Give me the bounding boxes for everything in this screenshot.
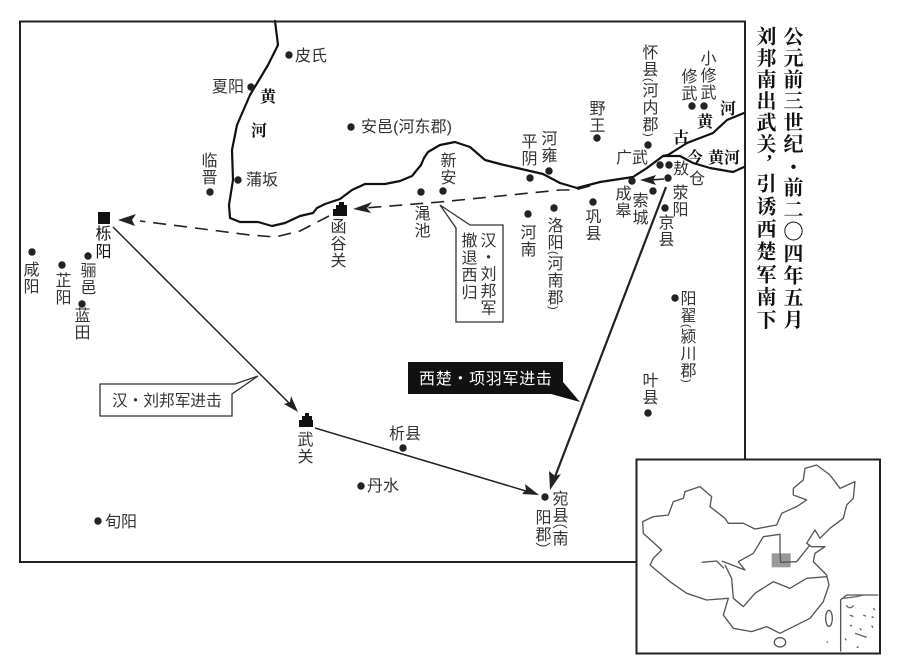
- inset: China locator map: [636, 460, 880, 654]
- inset: Yangtze River: [725, 565, 827, 607]
- place: 河雍: [538, 130, 558, 175]
- place: 平阴: [518, 133, 538, 182]
- place: 怀县: 怀县 ( 河内郡 ): [640, 44, 658, 136]
- title: 刘邦南出武关: [753, 25, 776, 155]
- place: 阳翟: [671, 290, 696, 382]
- place: 芷阳: 芷阳: [52, 272, 72, 306]
- place: 宛县: 宛县: [550, 490, 568, 524]
- title: 前二〇四年五月: [780, 177, 803, 331]
- place: 函谷关: [328, 202, 347, 269]
- place: 临晋: 临晋: [198, 152, 218, 186]
- river label: 古黄河: 古: [673, 128, 689, 147]
- title: ・: [780, 157, 802, 177]
- place: 索城: [630, 187, 657, 226]
- place: 敖仓: 仓: [689, 170, 705, 188]
- inset: Hainan: [774, 638, 786, 647]
- place: 新安: 新安: [438, 152, 456, 186]
- callout: 西楚·项羽军进击: [408, 362, 580, 402]
- place: 武关: [294, 413, 314, 465]
- place: 河南: [518, 210, 536, 258]
- place: 渑池: 渑池: [412, 205, 430, 239]
- place: 小修武: 小修武: [698, 50, 716, 101]
- place: 河雍: 河雍: [538, 130, 558, 164]
- place: 京县: [656, 204, 674, 248]
- title: [753, 25, 803, 332]
- place: 临晋: [198, 152, 218, 196]
- place: 宛县: [532, 490, 568, 547]
- callout: 汉·刘邦军撤退西归: 撤退西归: [458, 232, 478, 301]
- callout: 汉·刘邦军进击: 汉・刘邦军进击: [112, 392, 222, 410]
- place: 渑池: [412, 188, 430, 239]
- inset: Yellow River: [702, 534, 810, 570]
- place: 索城: 索城: [630, 192, 648, 226]
- place: 洛阳: 洛阳 ( 河南郡 ): [544, 217, 564, 309]
- place: 京县: 京县: [656, 214, 674, 248]
- river label: 黄河 north: 河: [251, 122, 267, 140]
- place: 栎阳: 栎阳: [92, 225, 112, 261]
- place: 皮氏: 皮氏: [295, 47, 327, 65]
- place: 宛县: 南: [550, 530, 568, 547]
- inset: highlighted region: [772, 553, 791, 567]
- place: 夏阳: 夏阳: [212, 78, 244, 96]
- place: 平阴: 平阴: [518, 133, 538, 167]
- ancient Yellow River: [229, 21, 744, 226]
- place: 修武: 修武: [678, 68, 698, 102]
- place: 析县: 析县: [389, 425, 421, 443]
- place: 广武: [616, 149, 664, 169]
- place: 巩县: [582, 198, 602, 242]
- place: 函谷关: 函谷关: [328, 218, 346, 269]
- place: 荥阳: [664, 174, 688, 218]
- river label: 今黄河: 黄河: [708, 148, 740, 167]
- inset: Taiwan: [826, 610, 832, 626]
- map frame: [20, 22, 745, 562]
- modern Yellow River: [663, 156, 744, 172]
- place: 广武: 广武: [616, 149, 648, 167]
- retreat route: 汉·刘邦军撤退: [118, 175, 664, 237]
- inset: China outline: [643, 465, 855, 633]
- place: 骊邑: [78, 252, 96, 296]
- place: 咸阳: 咸阳: [20, 261, 40, 295]
- river label: 古黄河: 黄: [697, 112, 715, 131]
- callout: 西楚·项羽军进击: 西楚・项羽军进击: [419, 370, 553, 388]
- callout: 汉·刘邦军撤退西归: [440, 205, 503, 322]
- river label: 古黄河: [673, 100, 736, 147]
- place: 叶县: [640, 372, 658, 417]
- inset: South China Sea box: [827, 595, 878, 652]
- title: ,: [767, 141, 772, 163]
- place: 安邑: 安邑(河东郡): [361, 118, 452, 136]
- place: 析县: [389, 425, 421, 452]
- place: 丹水: 丹水: [367, 477, 399, 495]
- river label: 黄河 north: 黄: [260, 87, 278, 106]
- river label: 今黄河: [687, 148, 740, 167]
- place: 敖仓: 敖: [673, 160, 689, 178]
- advance route: 汉军 栎阳 to 武关: [113, 227, 298, 412]
- place: 芷阳: [52, 261, 72, 306]
- advance route: 西楚军: [549, 187, 666, 490]
- place: 成皋: [612, 177, 636, 219]
- place: 荥阳: 荥阳: [670, 184, 688, 218]
- place: 成皋: 成皋: [612, 185, 632, 219]
- place: 蒲坂: 蒲坂: [246, 171, 278, 189]
- place: 骊邑: 骊邑: [78, 262, 96, 296]
- place: 栎阳: [92, 212, 112, 261]
- place: 旬阳: 旬阳: [105, 513, 137, 531]
- advance route: 汉军 武关 to 宛县: [315, 428, 539, 495]
- title: 引诱西楚军南下: [753, 173, 776, 332]
- place: 叶县: 叶县: [640, 372, 658, 406]
- place: 蒲坂: [234, 171, 278, 189]
- callout: 汉·刘邦军进击: [100, 376, 258, 416]
- callout: 汉·刘邦军撤退西归: 汉・刘邦军: [478, 232, 496, 316]
- title: 公元前三世纪: [780, 26, 803, 155]
- place: 敖仓: [665, 160, 705, 188]
- place: 阳翟: 阳翟 ( 颍川郡 ): [678, 290, 696, 382]
- river label: 黄河 north: [251, 87, 278, 140]
- river label: 今黄河: 今: [687, 148, 703, 167]
- place: 武关: 武关: [294, 431, 314, 465]
- place: 巩县: 巩县: [582, 208, 602, 242]
- place: 咸阳: [20, 248, 40, 295]
- place: 蓝田: 蓝田: [72, 307, 90, 341]
- place: 宛县: 阳郡: [532, 509, 552, 543]
- place: 河南: 河南: [518, 224, 536, 258]
- place: 野王: 野王: [586, 100, 606, 134]
- river label: 古黄河: 河: [720, 100, 736, 118]
